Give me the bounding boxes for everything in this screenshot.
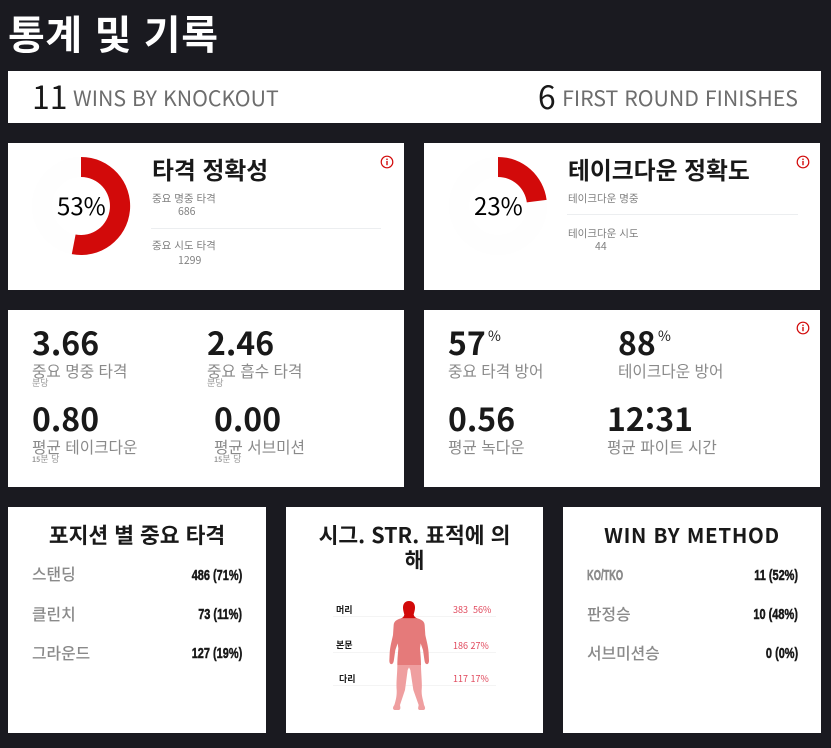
value: legs: 117 17% xyxy=(453,672,489,685)
donut chart: 23% xyxy=(498,157,547,202)
stat: wins by knockout: 11 WINS BY KNOCKOUT xyxy=(32,73,279,119)
label: takedowns attempted: 테이크다운 시도 xyxy=(568,226,639,241)
stat: average fight time xyxy=(607,395,717,458)
row: decision: 10 (48%) xyxy=(754,606,798,623)
stat: significant strikes absorbed: 분당 xyxy=(207,376,224,389)
row: submission: 서브미션승 xyxy=(587,641,660,664)
stat: average knockdowns: 평균 녹다운 xyxy=(448,435,525,458)
stat: takedown defense: % xyxy=(658,326,671,346)
value: attempted: 1299 xyxy=(178,253,201,268)
stat: significant strikes absorbed xyxy=(207,319,302,389)
stat: average knockdowns: 0.56 xyxy=(448,395,515,441)
stat: significant strikes absorbed: 2.46 xyxy=(207,319,274,365)
stat: significant strike defense: 57 xyxy=(448,319,486,365)
stat: average takedowns: 0.80 xyxy=(32,395,99,441)
stat: average takedowns: 평균 테이크다운 xyxy=(32,435,137,458)
row lines xyxy=(333,616,496,686)
heading: 테이크다운 정확도 xyxy=(568,151,750,186)
stat: average submissions: 0.00 xyxy=(214,395,281,441)
body region: torso xyxy=(389,618,429,665)
stat: average submissions: 15분 당 xyxy=(214,452,241,465)
title: 통계 및 기록 xyxy=(8,3,219,61)
row: clinch: 클린치 xyxy=(32,602,76,625)
panel: strikes by target xyxy=(286,507,543,733)
panel: knockout summary banner xyxy=(8,71,821,123)
heading: 포지션 별 중요 타격 xyxy=(49,519,225,550)
stat: significant strike defense: 중요 타격 방어 xyxy=(448,359,543,382)
body region: legs xyxy=(393,665,426,710)
row: standing: 486 (71%) xyxy=(191,567,242,584)
stat: significant strikes landed: 분당 xyxy=(32,376,49,389)
heading: 타격 정확성 xyxy=(152,151,268,186)
stat: average takedowns: 15분 당 xyxy=(32,452,59,465)
stat: average takedowns xyxy=(32,395,137,465)
stat: significant strikes landed xyxy=(32,319,127,389)
row: clinch xyxy=(32,602,242,625)
label: legs: 다리 xyxy=(339,672,356,685)
icon: info xyxy=(796,322,810,334)
panel: win by method xyxy=(563,507,821,733)
row: ground xyxy=(32,641,242,664)
row: decision xyxy=(587,602,798,625)
body region: head xyxy=(400,601,418,618)
stat: average submissions xyxy=(214,395,305,465)
row: standing xyxy=(32,562,242,585)
donut chart: 53% xyxy=(72,157,130,255)
row: ground: 그라운드 xyxy=(32,641,90,664)
donut value: 23% xyxy=(474,187,523,222)
icon: info xyxy=(796,156,810,168)
stat: significant strikes absorbed: 중요 흡수 타격 xyxy=(207,359,302,382)
heading xyxy=(319,519,510,575)
label: takedowns landed: 테이크다운 명중 xyxy=(568,191,639,206)
label: body: 본문 xyxy=(336,638,353,651)
label: significant strikes attempted: 중요 시도 타격 xyxy=(152,238,216,253)
icon: human body target map xyxy=(389,601,429,710)
value: landed: 686 xyxy=(178,204,195,219)
value: attempted: 44 xyxy=(595,239,607,254)
stat: average submissions: 평균 서브미션 xyxy=(214,435,305,458)
stat: significant strike defense: % xyxy=(488,326,501,346)
stat: average fight time: 평균 파이트 시간 xyxy=(607,435,717,458)
divider xyxy=(567,214,798,215)
panel: takedown accuracy xyxy=(424,143,820,290)
row: decision: 판정승 xyxy=(587,602,631,625)
heading: 해 xyxy=(405,544,424,575)
label: head: 머리 xyxy=(336,603,353,616)
panel: striking accuracy xyxy=(8,143,404,290)
row: standing: 스탠딩 xyxy=(32,562,76,585)
row: KO/TKO: KO/TKO xyxy=(587,567,623,584)
stat: average fight time: 12:31 xyxy=(607,395,693,441)
panel: strike and takedown rates xyxy=(8,310,404,487)
heading: WIN BY METHOD xyxy=(604,519,780,549)
stat: takedown defense xyxy=(618,319,723,382)
value: head: 383 56% xyxy=(453,603,491,616)
stat: significant strikes landed: 중요 명중 타격 xyxy=(32,359,127,382)
label: significant strikes landed: 중요 명중 타격 xyxy=(152,191,216,206)
stat: average knockdowns xyxy=(448,395,525,458)
row: KO/TKO: 11 (52%) xyxy=(754,567,798,584)
stat: takedown defense: 88 xyxy=(618,319,656,365)
stat: significant strike defense xyxy=(448,319,543,382)
row: submission xyxy=(587,641,798,664)
row: ground: 127 (19%) xyxy=(191,645,242,662)
divider xyxy=(151,228,381,229)
heading: 시그. STR. 표적에 의 xyxy=(319,519,510,550)
stat: takedown defense: 테이크다운 방어 xyxy=(618,359,723,382)
stat: significant strikes landed: 3.66 xyxy=(32,319,99,365)
row: KO/TKO xyxy=(587,567,798,584)
row: clinch: 73 (11%) xyxy=(198,606,242,623)
stat: first round finishes: 6 FIRST ROUND FINISHES xyxy=(538,73,798,119)
icon: info xyxy=(380,156,394,168)
donut value: 53% xyxy=(57,187,106,222)
value: body: 186 27% xyxy=(453,639,489,652)
panel: defense and fight time xyxy=(424,310,820,487)
row: submission: 0 (0%) xyxy=(766,645,798,662)
panel: strikes by position xyxy=(8,507,266,733)
